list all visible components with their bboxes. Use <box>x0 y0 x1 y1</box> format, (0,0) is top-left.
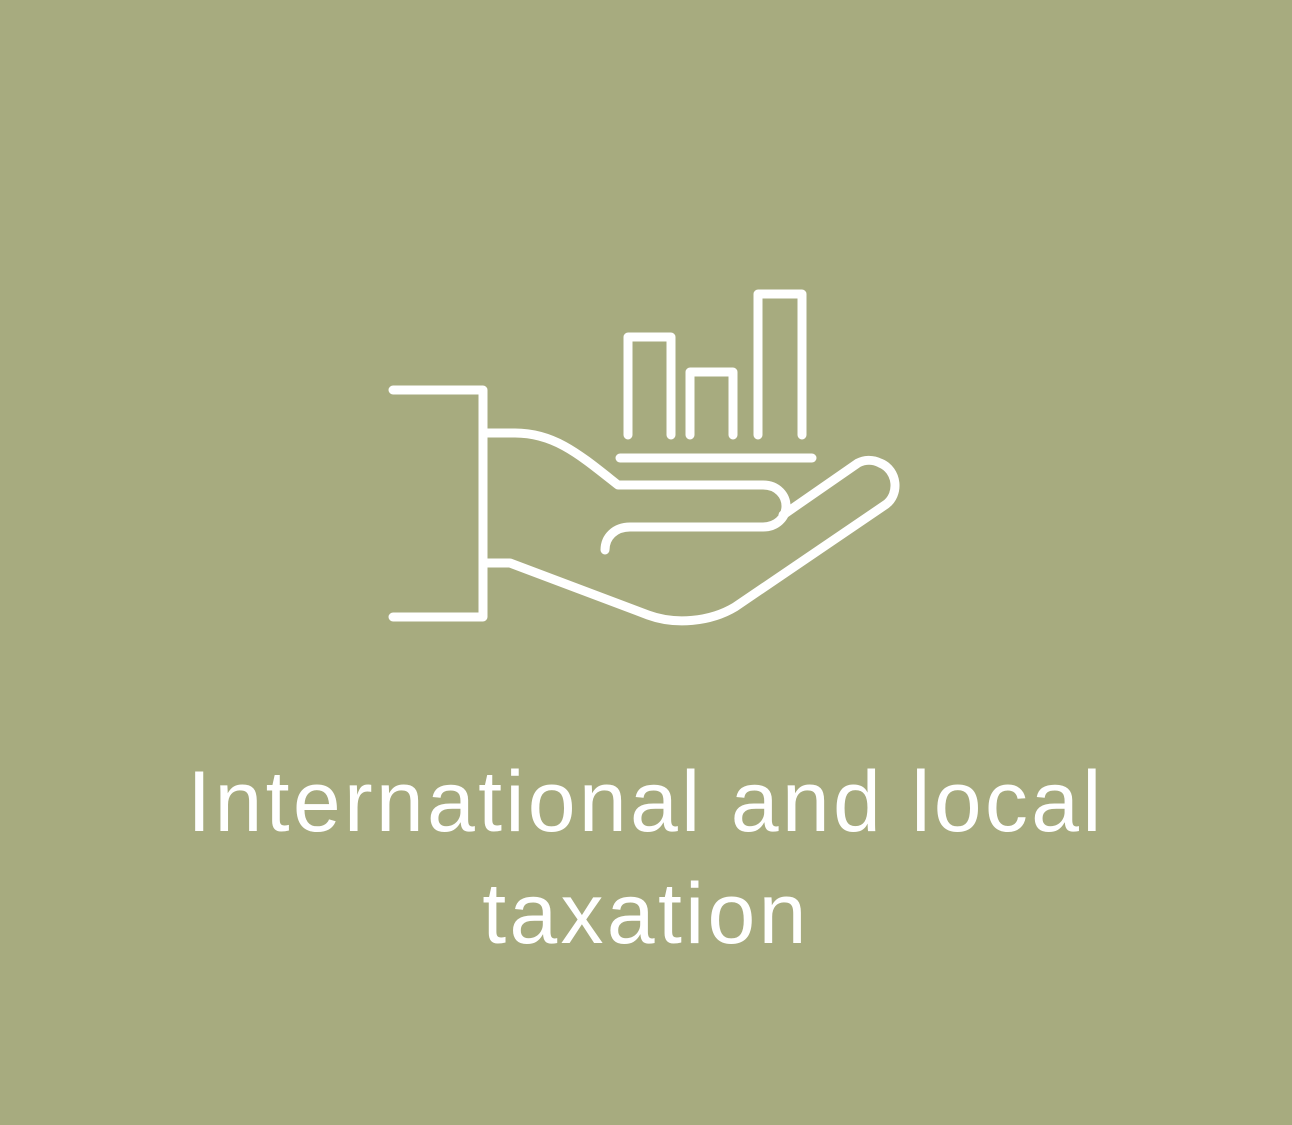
title text <box>187 754 1105 962</box>
bar chart <box>620 294 812 458</box>
hand outline <box>483 433 895 621</box>
title text: taxation <box>482 866 810 962</box>
title text: International and local <box>187 754 1105 850</box>
cuff bracket <box>393 390 483 617</box>
